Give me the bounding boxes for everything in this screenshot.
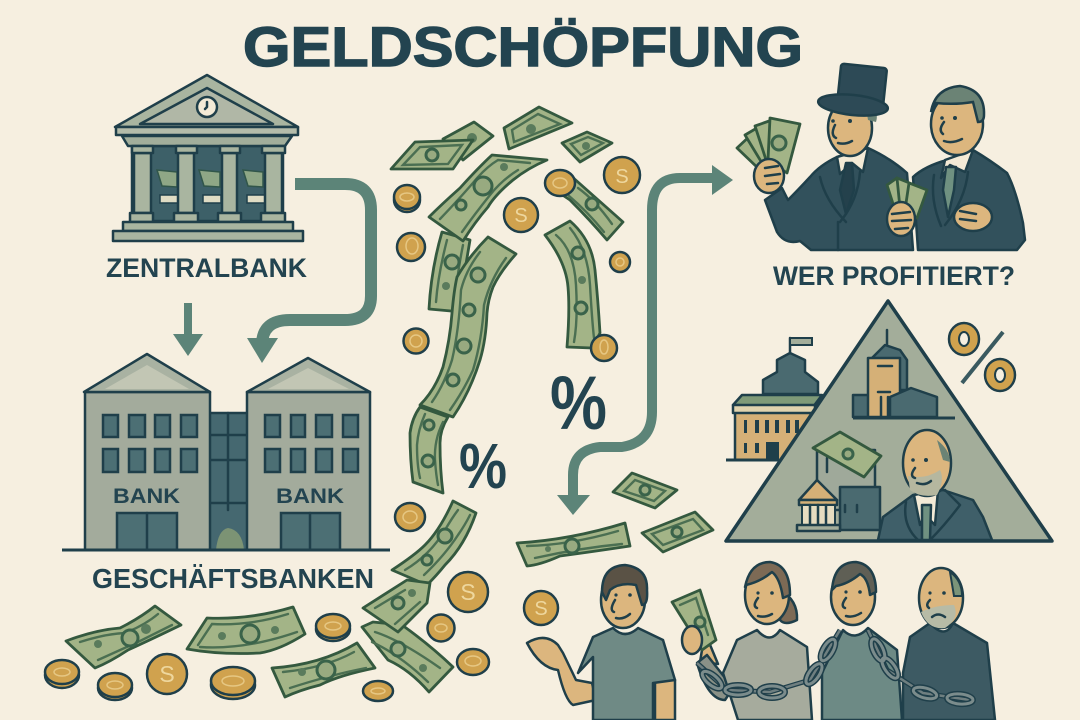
right bank: BANK	[276, 485, 344, 508]
coin	[98, 673, 132, 700]
banknote	[517, 523, 630, 566]
banknote	[504, 107, 572, 149]
coin: S	[615, 166, 629, 188]
label: Wer profitiert?: WER PROFITIERT?	[773, 261, 1015, 291]
icon: central bank building	[113, 75, 303, 241]
banknotes: lower middle group	[517, 473, 713, 566]
banknote	[429, 232, 470, 312]
coin	[545, 170, 575, 196]
people in debt with chains	[524, 562, 995, 720]
coin	[610, 252, 630, 272]
coin: S	[460, 579, 476, 605]
banknote	[272, 643, 375, 697]
person with open hand	[527, 565, 675, 720]
buildings inside pyramid bottom	[797, 432, 881, 531]
label: Zentralbank: ZENTRALBANK	[106, 253, 307, 283]
pyramid with buildings and person	[726, 301, 1052, 541]
money flow: banknotes and coins	[391, 107, 640, 493]
banknote	[545, 221, 600, 348]
money pile: bottom left banknotes and coins	[45, 501, 489, 701]
banknote	[562, 132, 612, 162]
title: GELDSCHÖPFUNG	[243, 15, 803, 78]
person inside pyramid	[878, 430, 992, 540]
icon: commercial bank buildings	[62, 354, 390, 550]
coin	[45, 660, 79, 688]
coin	[397, 233, 425, 261]
coin: S	[534, 598, 548, 620]
coin	[363, 681, 393, 701]
coin	[211, 667, 255, 699]
banknote	[66, 606, 181, 668]
arrow: flow up to profiteers and down to people	[557, 165, 733, 515]
right bank	[247, 358, 370, 550]
coin	[504, 198, 538, 232]
buildings inside pyramid top	[853, 330, 955, 418]
banknote	[555, 175, 623, 240]
coin	[147, 654, 187, 694]
banknote	[391, 140, 473, 169]
coin	[591, 335, 617, 361]
old man	[903, 568, 995, 720]
banknote	[420, 237, 516, 417]
label: Geschäftsbanken: GESCHÄFTSBANKEN	[92, 563, 374, 594]
building behind pyramid	[726, 338, 822, 460]
coin	[457, 649, 489, 675]
coin	[316, 614, 350, 641]
coin	[395, 503, 425, 531]
coin: S	[159, 661, 175, 687]
banknote	[443, 122, 493, 160]
man with grey hair	[887, 86, 1025, 250]
percent sign: %	[459, 430, 507, 502]
coin: S	[514, 205, 528, 227]
coin	[448, 572, 488, 612]
banknote	[429, 155, 547, 241]
illustration: two wealthy men	[737, 62, 1025, 250]
banknote	[392, 501, 476, 585]
banknote	[613, 473, 677, 508]
banknote	[187, 607, 305, 654]
arrow: short down arrow	[173, 303, 203, 356]
coin	[428, 614, 454, 642]
coin	[394, 185, 420, 212]
arrow: central bank to commercial banks	[247, 184, 371, 363]
banknote	[410, 407, 448, 493]
woman with banknotes	[672, 562, 812, 720]
coin	[524, 591, 558, 625]
third person	[822, 562, 902, 720]
man with top hat	[737, 62, 913, 250]
banknote	[363, 580, 430, 632]
gold percent sign	[949, 323, 1015, 391]
left bank	[84, 354, 210, 550]
chain	[697, 630, 973, 705]
coin	[604, 157, 640, 193]
banknote	[642, 512, 713, 552]
left bank: BANK	[113, 485, 180, 508]
coin	[404, 328, 428, 354]
banknote	[362, 622, 453, 692]
percent sign: %	[550, 361, 607, 446]
